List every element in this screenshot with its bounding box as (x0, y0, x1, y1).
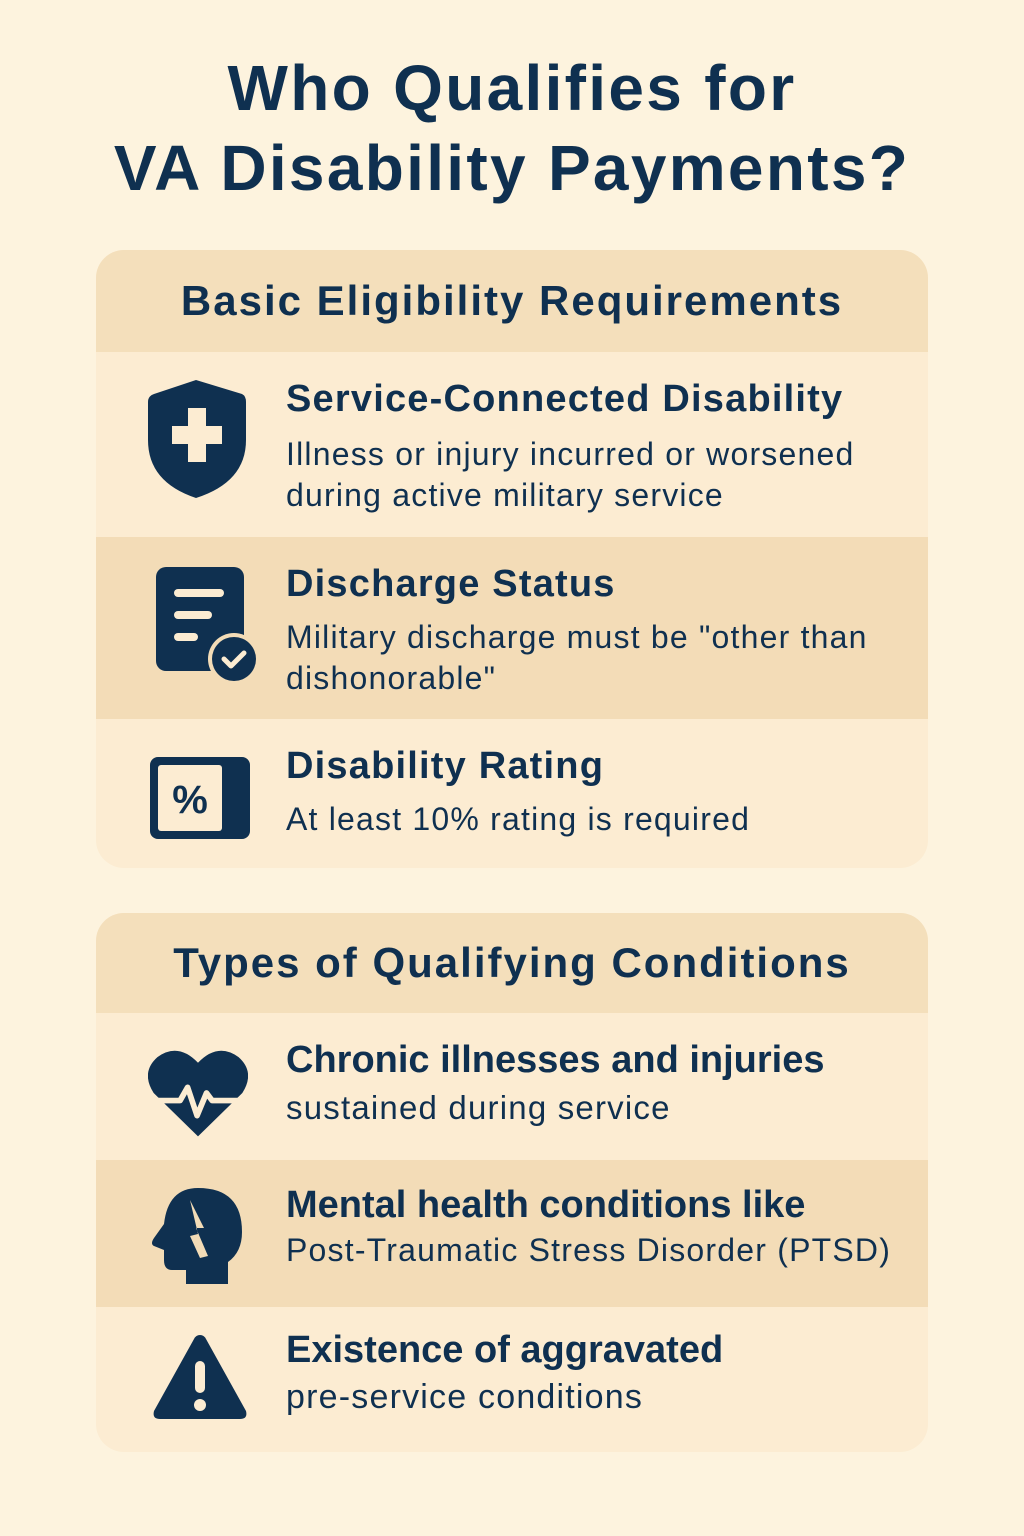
title: VA Disability Payments? (114, 132, 910, 204)
heading: qualifying conditions (96, 913, 928, 1013)
text: chronic: Chronic illnesses and injuries (286, 1039, 824, 1081)
row: discharge: Military discharge must be "other than (286, 619, 868, 655)
row: service-connected (148, 378, 854, 513)
heading: qualifying conditions: Types of Qualifying Conditions (173, 939, 851, 986)
text: discharge: Discharge Status (286, 563, 616, 605)
icon: shield cross (148, 380, 246, 498)
row: rating (150, 745, 750, 839)
row: chronic: sustained during service (286, 1089, 671, 1126)
row: discharge: dishonorable" (286, 660, 496, 696)
row: aggravated (154, 1329, 723, 1419)
row: rating: At least 10% rating is required (286, 801, 750, 837)
heading: basic eligibility: Basic Eligibility Requirements (181, 277, 843, 324)
text: rating: Disability Rating (286, 745, 604, 787)
text: aggravated: Existence of aggravated (286, 1329, 723, 1371)
row: mental health (96, 1160, 928, 1307)
icon: percent (150, 757, 250, 839)
icon: document check (156, 567, 256, 681)
heading: basic eligibility (96, 250, 928, 352)
row: mental health: Post-Traumatic Stress Disorder (PTSD) (286, 1232, 891, 1268)
row: chronic (148, 1039, 824, 1136)
panel: basic eligibility (96, 250, 928, 868)
row: service-connected: Illness or injury incurred or worsened (286, 436, 854, 472)
text: service-connected: Service-Connected Disability (286, 378, 843, 420)
text: mental health: Mental health conditions like (286, 1184, 805, 1226)
row: service-connected: during active military service (286, 477, 724, 513)
icon: heart pulse (148, 1050, 248, 1136)
row: discharge (96, 537, 928, 719)
icon: head (152, 1188, 242, 1284)
title (114, 52, 910, 204)
icon: percent: % (172, 778, 208, 822)
row: aggravated: pre-service conditions (286, 1378, 643, 1416)
title: Who Qualifies for (228, 52, 796, 124)
icon: warning (154, 1335, 246, 1419)
panel: qualifying conditions (96, 913, 928, 1452)
